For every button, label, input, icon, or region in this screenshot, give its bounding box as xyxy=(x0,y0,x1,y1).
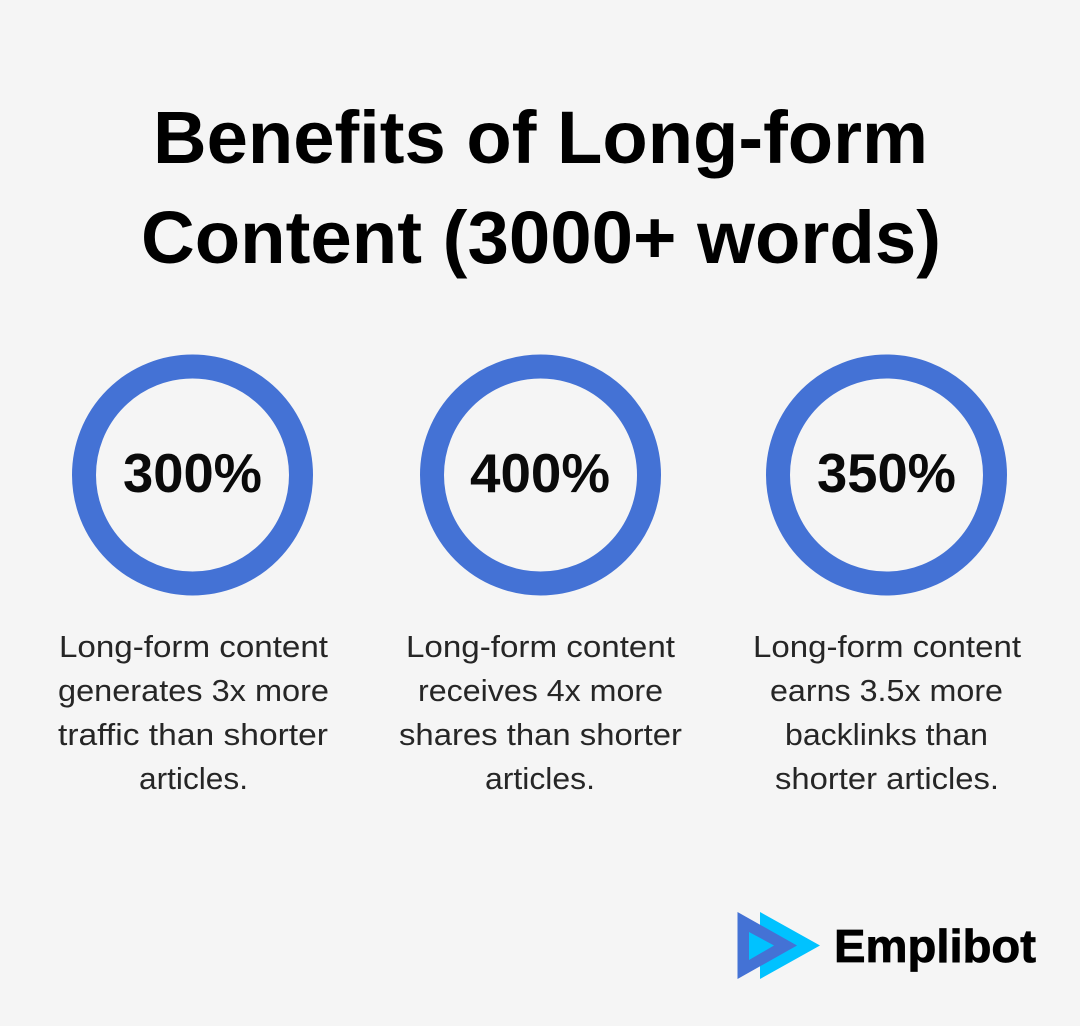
description: shares: Long-form content xyxy=(406,629,675,664)
description: traffic: Long-form content xyxy=(59,629,328,664)
title: Benefits of Long-form xyxy=(153,96,928,179)
description: traffic xyxy=(58,629,329,796)
logo: Emplibot xyxy=(738,912,1036,979)
ring: 400% xyxy=(432,366,649,584)
description: backlinks: backlinks than xyxy=(785,717,988,752)
panel: backlinks stat xyxy=(753,366,1021,796)
description: backlinks xyxy=(753,629,1021,796)
description: traffic: articles. xyxy=(139,761,248,796)
title xyxy=(141,96,941,279)
description: shares: receives 4x more xyxy=(418,673,663,708)
description: backlinks: shorter articles. xyxy=(775,761,999,796)
number: 400%: 400% xyxy=(470,442,610,504)
ring: 300% xyxy=(84,366,301,584)
wordmark: Emplibot xyxy=(834,920,1036,972)
icon: play triangles xyxy=(738,912,820,979)
description: shares: articles. xyxy=(485,761,595,796)
description: traffic: generates 3x more xyxy=(58,673,329,708)
description: shares: shares than shorter xyxy=(399,717,682,752)
title: Content (3000+ words) xyxy=(141,196,941,279)
ring: 350% xyxy=(778,366,995,584)
number: 350%: 350% xyxy=(817,442,956,504)
description: traffic: traffic than shorter xyxy=(58,717,328,752)
description: backlinks: earns 3.5x more xyxy=(770,673,1003,708)
number: 300%: 300% xyxy=(123,442,262,504)
description: backlinks: Long-form content xyxy=(753,629,1021,664)
panel: shares stat xyxy=(399,366,682,796)
description: shares xyxy=(399,629,682,796)
panel: traffic stat xyxy=(58,366,329,796)
